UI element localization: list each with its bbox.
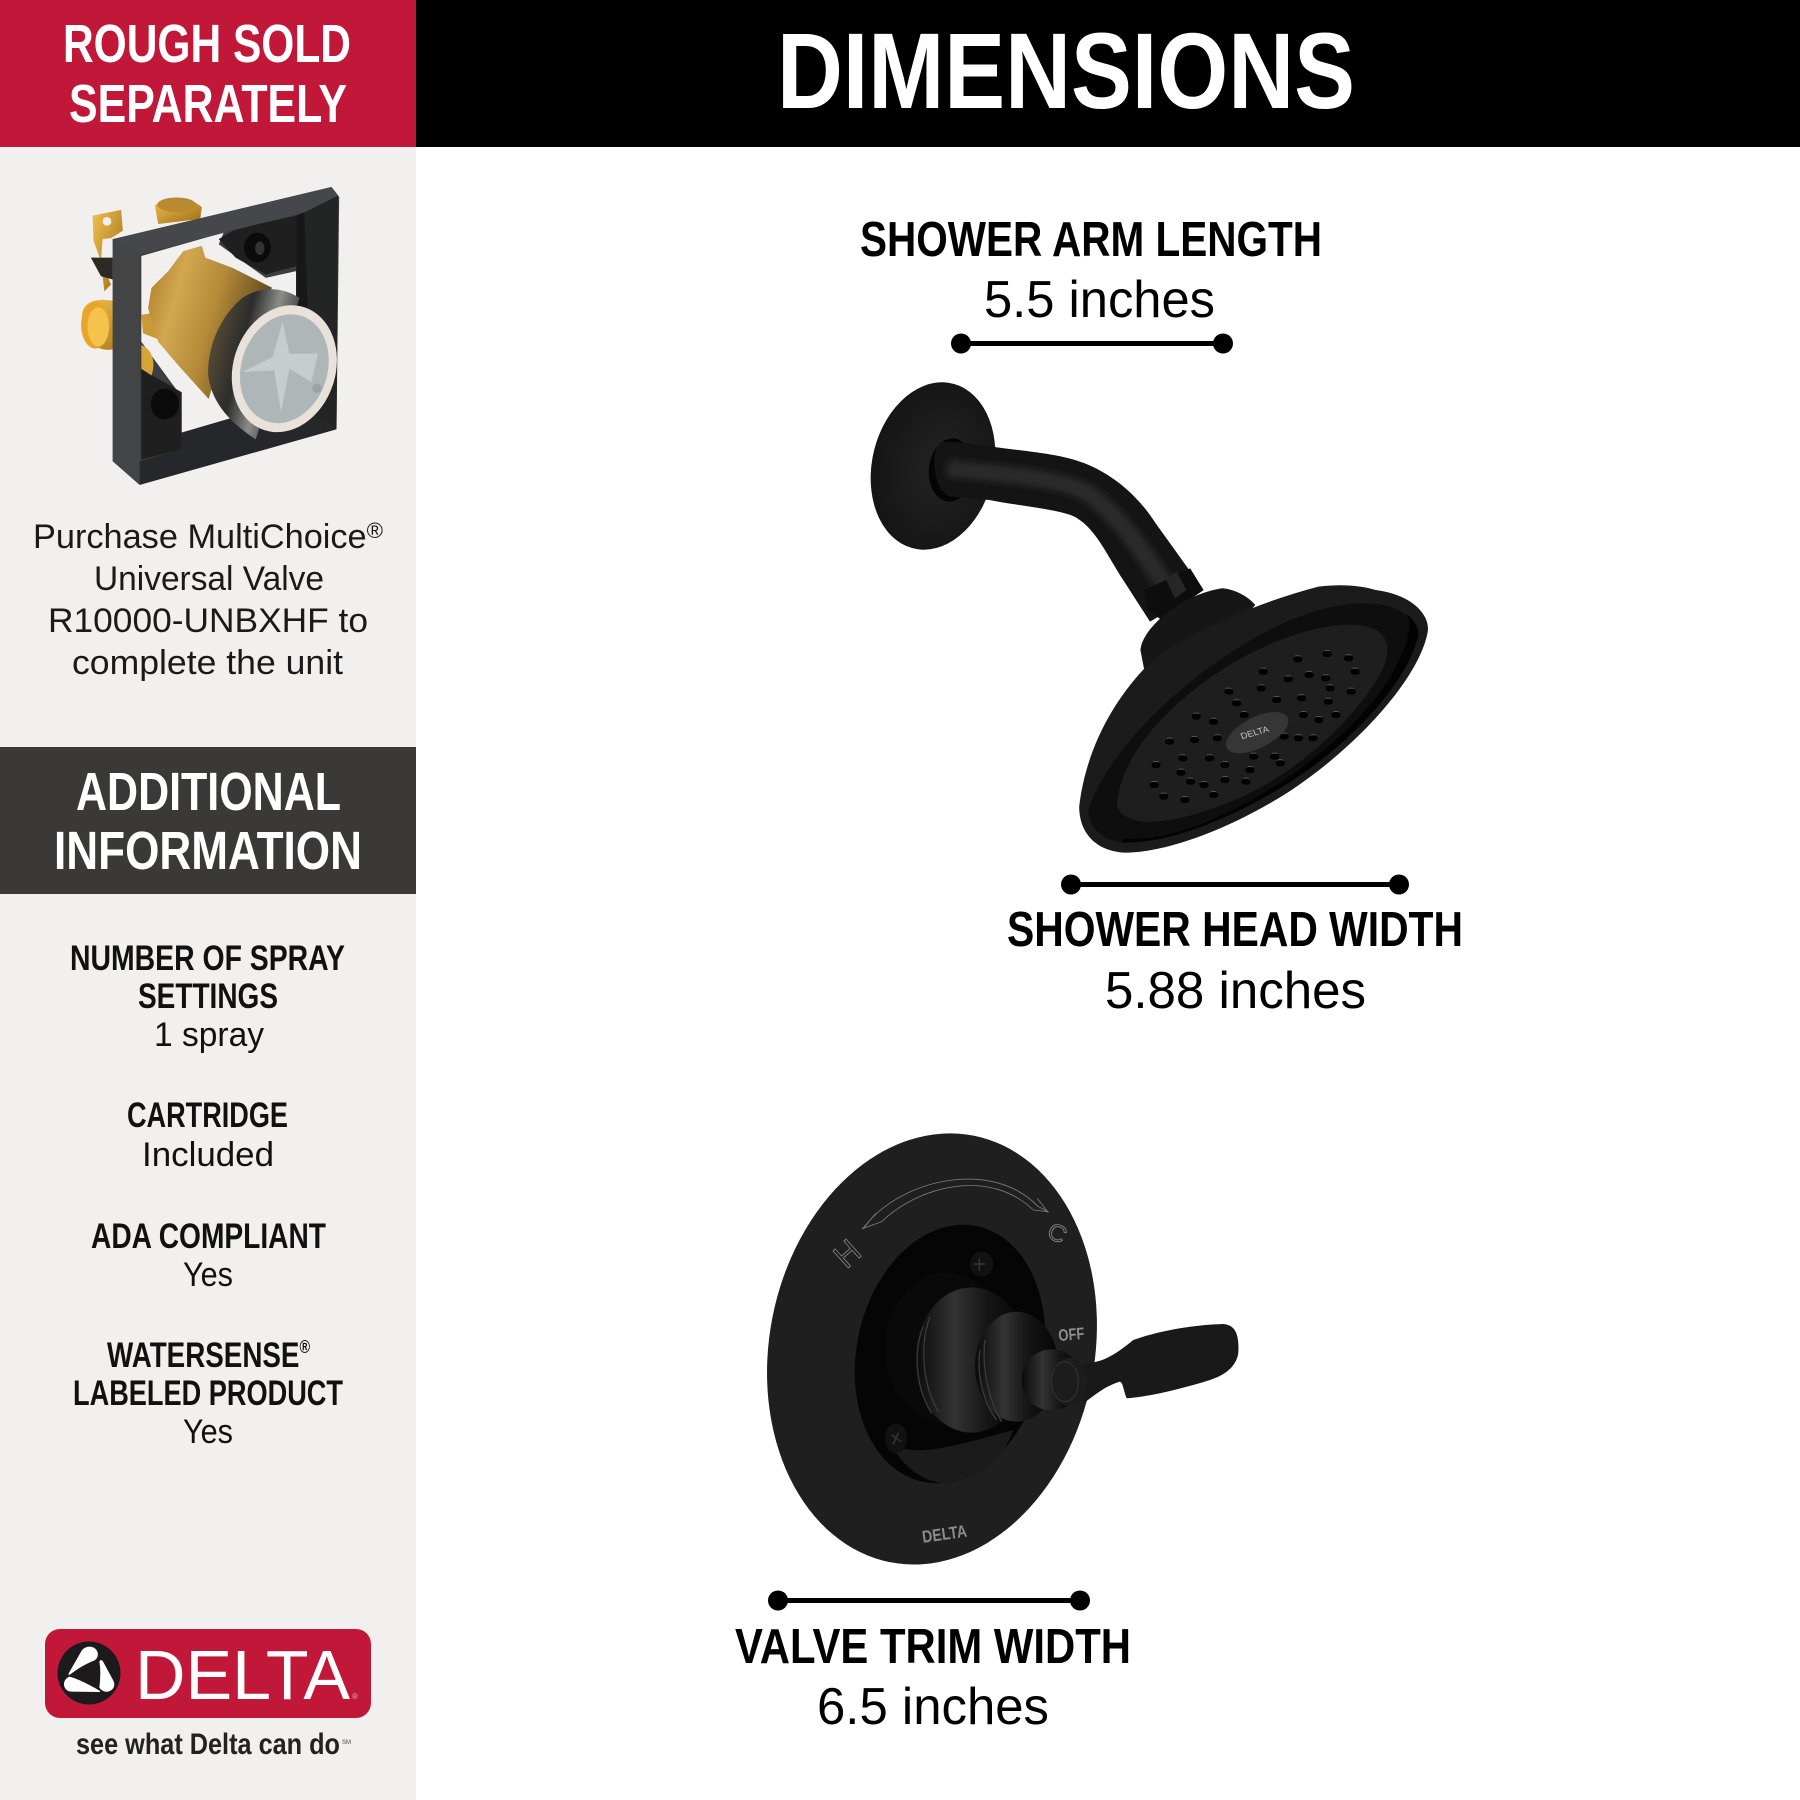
- info item: watersense: WATERSENSE: [107, 1336, 349, 1375]
- info item: cartridge: [127, 1096, 288, 1174]
- dimension line: shower arm: [951, 334, 1233, 354]
- info item: ada compliant: ADA COMPLIANT: [91, 1217, 326, 1256]
- product: valve trim: H: [827, 1233, 869, 1276]
- logo: delta: ®: [352, 1692, 358, 1701]
- banner: rough sold separately: [0, 0, 416, 147]
- logo: delta: [45, 1629, 371, 1761]
- dimension line: shower head: [1061, 874, 1409, 894]
- info item: watersense: ®: [299, 1337, 310, 1357]
- text: purchase note: complete the unit: [72, 644, 344, 682]
- logo: delta: SM: [342, 1740, 351, 1746]
- info item: number of spray settings: 1 spray: [154, 1016, 264, 1054]
- banner: additional information: ADDITIONAL: [76, 762, 341, 822]
- banner: additional information: INFORMATION: [54, 821, 362, 881]
- header: dimensions: [416, 0, 1800, 147]
- text: purchase note: Universal Valve: [94, 560, 324, 598]
- banner: additional information: [0, 747, 416, 894]
- product: valve trim: C: [1043, 1217, 1071, 1250]
- info item: number of spray settings: SETTINGS: [138, 977, 278, 1016]
- info item: ada compliant: [91, 1217, 326, 1294]
- panel: left sidebar: [0, 0, 416, 1800]
- info item: number of spray settings: NUMBER OF SPRAY: [70, 939, 345, 978]
- label: shower head width: SHOWER HEAD WIDTH: [1007, 903, 1463, 957]
- text: purchase note: R10000-UNBXHF to: [48, 602, 368, 640]
- label: shower arm length: SHOWER ARM LENGTH: [860, 213, 1322, 267]
- label: shower arm length: [860, 213, 1322, 329]
- text: purchase note: Purchase MultiChoice: [33, 518, 364, 556]
- info item: ada compliant: Yes: [183, 1256, 233, 1294]
- header: dimensions: DIMENSIONS: [777, 10, 1355, 131]
- dimension line: valve trim: [768, 1590, 1090, 1610]
- logo: delta: DELTA: [135, 1636, 350, 1714]
- product: shower arm and head: [857, 374, 1428, 853]
- icon: universal valve product: [81, 187, 353, 485]
- label: shower head width: 5.88 inches: [1105, 962, 1366, 1020]
- label: shower arm length: 5.5 inches: [984, 271, 1215, 329]
- product: valve trim: OFF: [1058, 1324, 1085, 1345]
- info item: cartridge: Included: [142, 1136, 274, 1174]
- product: valve trim: [731, 1105, 1238, 1593]
- text: purchase note: [33, 518, 383, 682]
- label: valve trim width: 6.5 inches: [817, 1678, 1049, 1736]
- logo: delta: see what Delta can do: [76, 1728, 340, 1761]
- info item: watersense: LABELED PRODUCT: [73, 1374, 343, 1413]
- product: shower arm and head: DELTA: [1239, 724, 1271, 741]
- product: valve trim: DELTA: [921, 1521, 969, 1547]
- text: purchase note: ®: [367, 518, 383, 543]
- label: valve trim width: [735, 1620, 1131, 1736]
- label: shower head width: [1007, 903, 1463, 1020]
- info item: cartridge: CARTRIDGE: [127, 1096, 288, 1135]
- info item: watersense: Yes: [183, 1413, 233, 1451]
- banner: rough sold separately: ROUGH SOLD: [63, 14, 351, 74]
- info item: number of spray settings: [70, 939, 345, 1054]
- banner: rough sold separately: SEPARATELY: [69, 74, 347, 134]
- info item: watersense: [73, 1336, 343, 1451]
- label: valve trim width: VALVE TRIM WIDTH: [735, 1620, 1131, 1674]
